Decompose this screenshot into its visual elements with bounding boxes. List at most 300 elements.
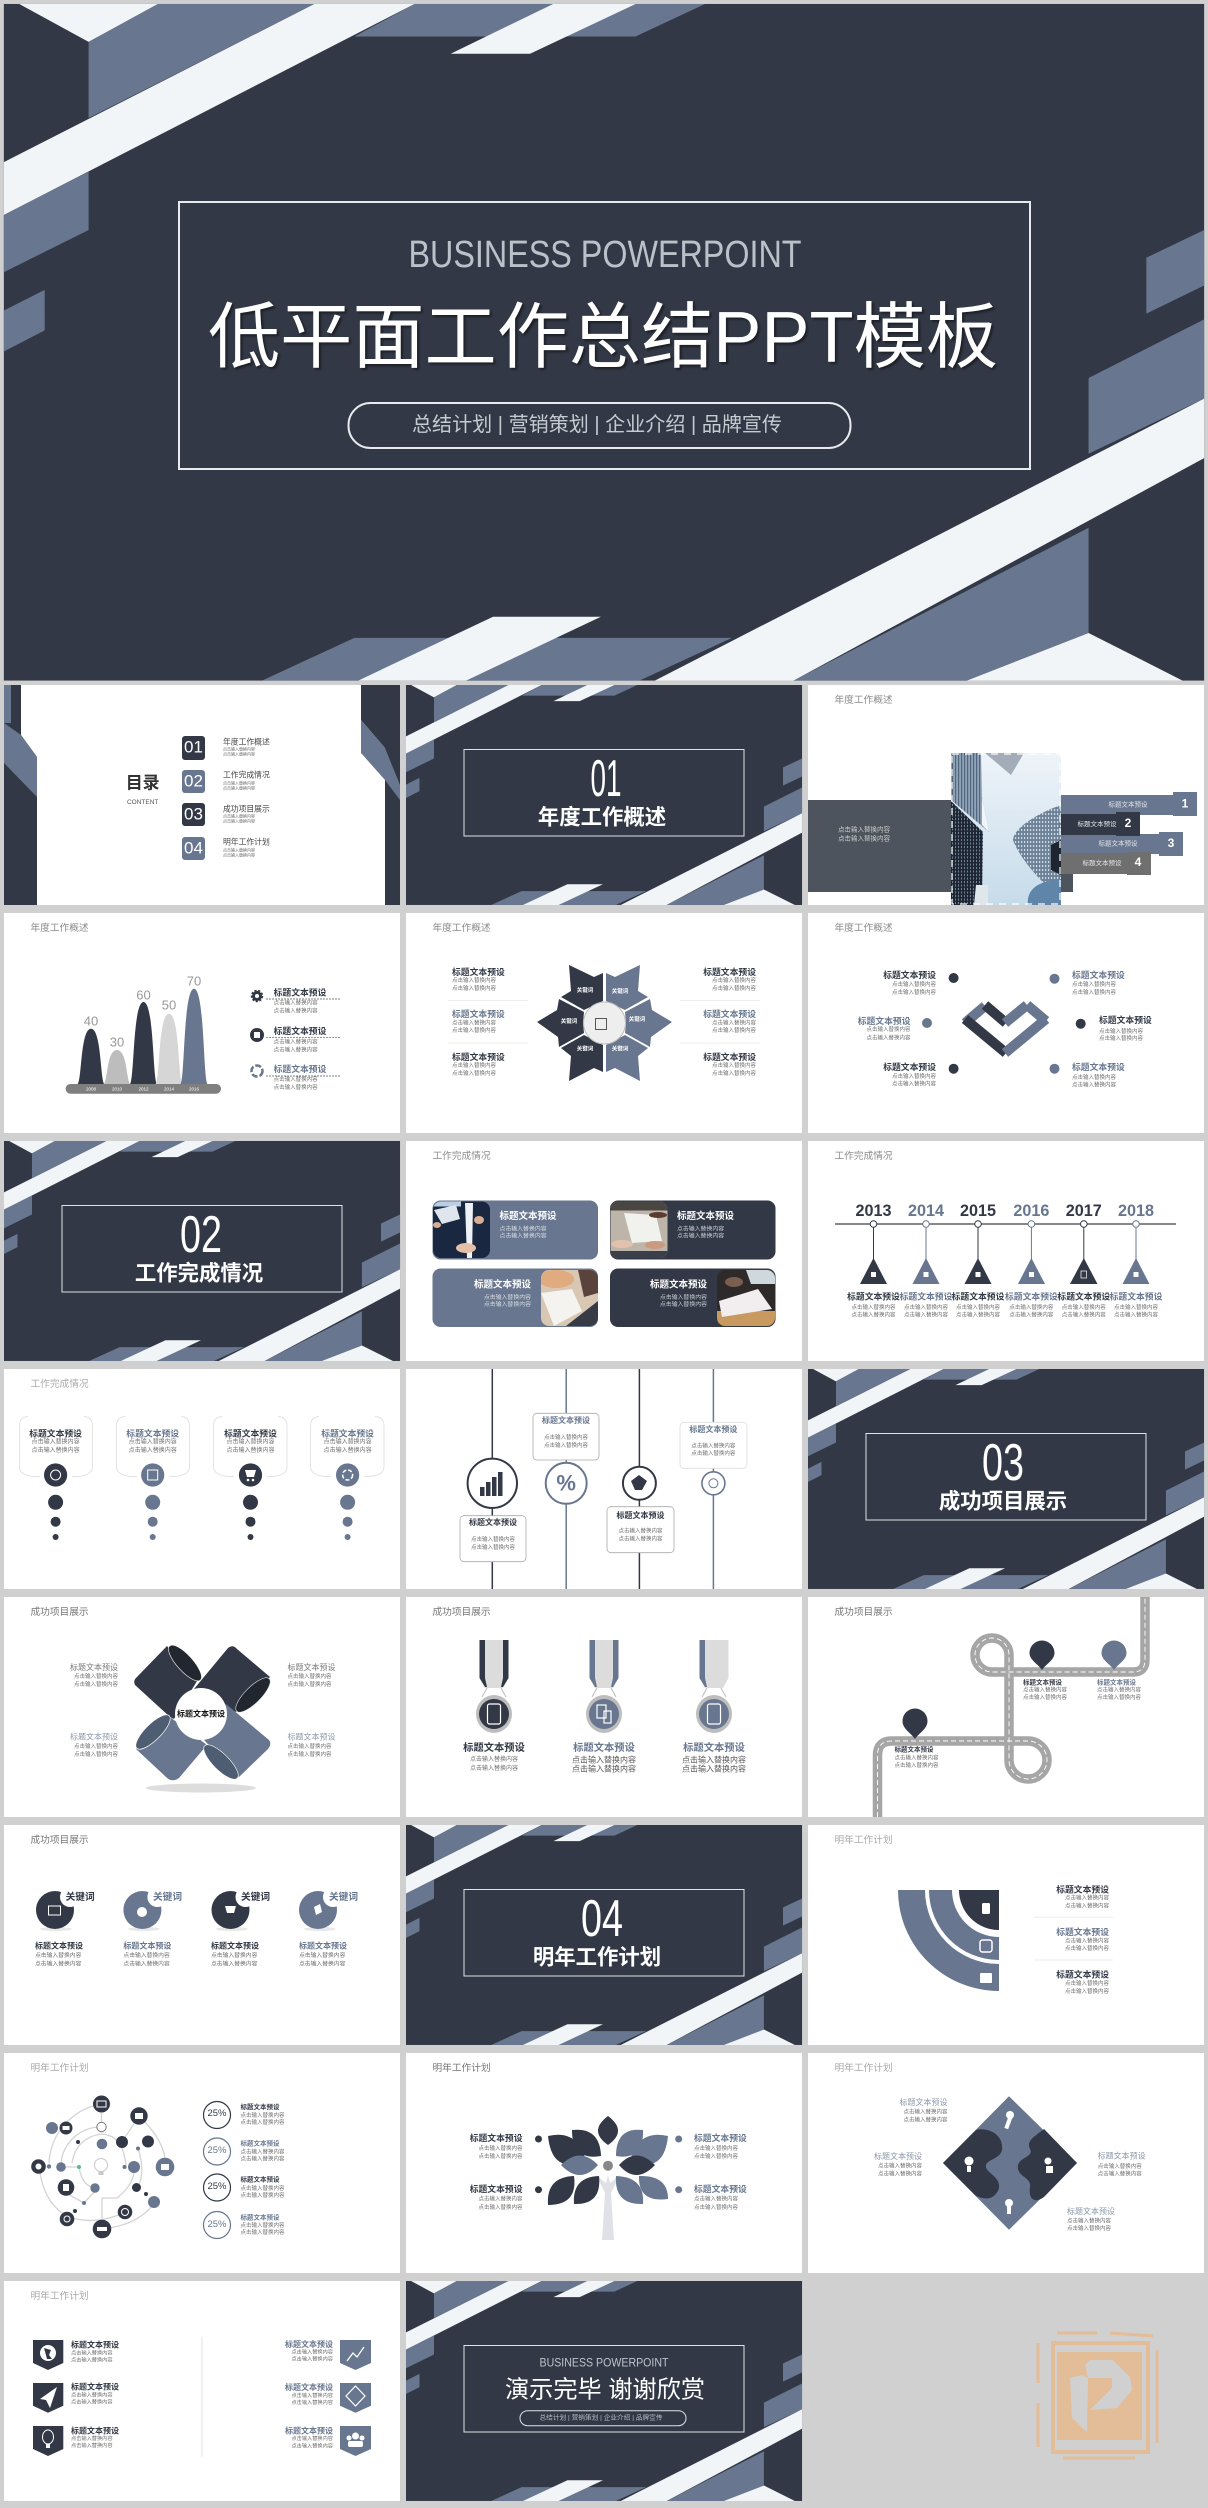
percent 3: 25% bbox=[207, 2181, 227, 2192]
keyword 1: 点击输入替换内容 bbox=[35, 1951, 82, 1959]
text mid left bbox=[874, 2151, 922, 2177]
card 1: 标题文本预设 bbox=[500, 1210, 557, 1222]
column 2: 点击输入替换内容 bbox=[129, 1437, 177, 1445]
slide: road map bbox=[808, 1597, 1204, 1817]
star of arrows: 关键词 bbox=[577, 1044, 594, 1052]
medal 2: 点击输入替换内容 bbox=[572, 1764, 636, 1774]
heading: 年度工作概述 bbox=[834, 693, 893, 706]
right texts: 点击输入替换内容 bbox=[712, 976, 756, 984]
left texts: 标题文本预设 bbox=[452, 1051, 505, 1062]
right shield 1: 点击输入替换内容 bbox=[291, 2348, 333, 2356]
percent 4: 25% bbox=[207, 2219, 227, 2230]
thread 1: 点击输入替换内容 bbox=[471, 1535, 515, 1543]
left shield 1: 点击输入替换内容 bbox=[71, 2348, 113, 2356]
slide background bbox=[4, 1369, 400, 1589]
right texts bbox=[694, 2132, 747, 2211]
bell chart: 60 bbox=[136, 988, 151, 1002]
left shield 3: 点击输入替换内容 bbox=[71, 2434, 113, 2442]
item 04: 明年工作计划 bbox=[223, 836, 270, 846]
text mid left: 标题文本预设 bbox=[874, 2151, 922, 2161]
right shield 2: 点击输入替换内容 bbox=[291, 2398, 333, 2406]
thread 2: 点击输入替换内容 bbox=[544, 1441, 588, 1449]
slide: quarter rings bbox=[808, 1825, 1204, 2045]
left texts: 点击输入替换内容 bbox=[892, 980, 936, 988]
right texts: 点击输入替换内容 bbox=[712, 1061, 756, 1069]
text 2: 点击输入替换内容 bbox=[1023, 1686, 1068, 1694]
card 1: 点击输入替换内容 bbox=[500, 1224, 547, 1232]
left texts: 点击输入替换内容 bbox=[478, 2195, 523, 2203]
pin 3 bbox=[1102, 1640, 1126, 1670]
shadow bbox=[146, 1784, 256, 1792]
card 4: 点击输入替换内容 bbox=[660, 1293, 707, 1301]
slide: vertical threads bbox=[406, 1369, 802, 1589]
right texts: 点击输入替换内容 bbox=[694, 2203, 739, 2211]
right decoration bbox=[361, 685, 400, 905]
left shield 2 bbox=[33, 2382, 119, 2413]
keyword 3: 点击输入替换内容 bbox=[211, 1959, 258, 1967]
left texts bbox=[858, 969, 936, 1088]
right texts: 点击输入替换内容 bbox=[694, 2152, 739, 2160]
keyword 1 bbox=[35, 1887, 95, 1967]
card 2: 点击输入替换内容 bbox=[677, 1224, 724, 1232]
road bbox=[878, 1597, 1145, 1817]
card 2 bbox=[610, 1200, 776, 1260]
grey panel bbox=[808, 800, 1073, 892]
heading: 年度工作概述 bbox=[834, 921, 893, 934]
thread 1 bbox=[460, 1369, 526, 1589]
keyword 3: 点击输入替换内容 bbox=[211, 1951, 258, 1959]
heading: 明年工作计划 bbox=[834, 1833, 893, 1846]
heading: 成功项目展示 bbox=[432, 1606, 491, 1618]
keyword 1: 关键词 bbox=[66, 1890, 95, 1903]
right texts: 点击输入替换内容 bbox=[288, 1742, 332, 1750]
right texts: 点击输入替换内容 bbox=[288, 1672, 332, 1680]
right texts: 点击输入替换内容 bbox=[712, 1026, 756, 1034]
right texts bbox=[288, 1662, 336, 1758]
slide: photo with ribbons bbox=[808, 685, 1204, 905]
keyword 2: 点击输入替换内容 bbox=[123, 1959, 170, 1967]
left shield 2: 点击输入替换内容 bbox=[71, 2390, 113, 2398]
text bottom right bbox=[1067, 2206, 1115, 2232]
watermark stamp bbox=[1038, 2333, 1157, 2458]
list item 3: 标题文本预设 bbox=[274, 1063, 327, 1074]
left decoration bbox=[4, 685, 37, 905]
left texts: 点击输入替换内容 bbox=[74, 1672, 118, 1680]
item 03: 点击输入替换内容 bbox=[223, 812, 255, 818]
item 04: 点击输入替换内容 bbox=[223, 852, 255, 858]
text 1: 标题文本预设 bbox=[1056, 1883, 1109, 1894]
keyword 2: 点击输入替换内容 bbox=[123, 1951, 170, 1959]
percent 2 bbox=[204, 2138, 285, 2165]
card 2: 点击输入替换内容 bbox=[677, 1232, 724, 1240]
list item 1: 标题文本预设 bbox=[274, 986, 327, 998]
bell chart: 30 bbox=[110, 1034, 124, 1050]
item 02: 工作完成情况 bbox=[223, 770, 270, 780]
section number: 03 bbox=[982, 1434, 1024, 1492]
star of arrows bbox=[537, 965, 672, 1081]
text right: 点击输入替换内容 bbox=[1098, 2170, 1142, 2178]
slide background bbox=[808, 1597, 1204, 1817]
column 2: 标题文本预设 bbox=[126, 1427, 179, 1438]
ribbon 1 bbox=[1061, 792, 1197, 816]
bell chart: 2016 bbox=[189, 1086, 200, 1092]
percent 1: 点击输入替换内容 bbox=[240, 2111, 285, 2119]
left texts: 点击输入替换内容 bbox=[892, 1080, 936, 1088]
right texts: 点击输入替换内容 bbox=[288, 1680, 332, 1688]
leaves bbox=[548, 2116, 668, 2205]
right texts: 标题文本预设 bbox=[1072, 1061, 1125, 1072]
cover background shapes bbox=[4, 1141, 400, 1361]
text 3 bbox=[1097, 1678, 1142, 1701]
year 2015: 标题文本预设 bbox=[952, 1291, 1005, 1302]
slide: bubbles columns bbox=[4, 1369, 400, 1589]
right texts: 点击输入替换内容 bbox=[694, 2195, 739, 2203]
text 2: 标题文本预设 bbox=[1056, 1926, 1109, 1937]
column 1: 点击输入替换内容 bbox=[32, 1446, 80, 1454]
item 02: 点击输入替换内容 bbox=[223, 780, 255, 786]
heading: 工作完成情况 bbox=[432, 1149, 491, 1162]
column 1: 标题文本预设 bbox=[29, 1427, 82, 1438]
year 2014 bbox=[900, 1202, 953, 1319]
heading: 工作完成情况 bbox=[30, 1377, 89, 1390]
ribbon 3: 标题文本预设 bbox=[1098, 838, 1138, 848]
percent 3: 标题文本预设 bbox=[240, 2174, 280, 2184]
slide: shields bbox=[4, 2281, 400, 2501]
heart diagram bbox=[965, 1005, 1046, 1053]
right texts: 标题文本预设 bbox=[288, 1732, 336, 1742]
text 1 bbox=[1056, 1883, 1109, 1910]
keyword 3 bbox=[211, 1887, 270, 1967]
column 4: 点击输入替换内容 bbox=[324, 1437, 372, 1445]
card 4: 标题文本预设 bbox=[650, 1278, 707, 1290]
medal 1 bbox=[463, 1640, 526, 1772]
right texts: 标题文本预设 bbox=[694, 2183, 747, 2194]
right texts: 标题文本预设 bbox=[1072, 969, 1125, 980]
right texts: 点击输入替换内容 bbox=[1099, 1027, 1144, 1035]
left shield 2: 点击输入替换内容 bbox=[71, 2397, 113, 2405]
left shield 1: 标题文本预设 bbox=[71, 2340, 119, 2350]
keyword 4: 点击输入替换内容 bbox=[299, 1959, 346, 1967]
list item 2: 点击输入替换内容 bbox=[274, 1045, 318, 1053]
medal 3 bbox=[682, 1640, 746, 1774]
right texts: 标题文本预设 bbox=[703, 1051, 756, 1062]
thread 1: 点击输入替换内容 bbox=[471, 1543, 515, 1551]
right texts: 点击输入替换内容 bbox=[712, 984, 756, 992]
left texts: 点击输入替换内容 bbox=[478, 2152, 523, 2160]
bell chart: 2014 bbox=[164, 1086, 175, 1092]
item 01: 年度工作概述 bbox=[223, 736, 270, 746]
right texts: 标题文本预设 bbox=[1099, 1014, 1152, 1025]
thread 3: 点击输入替换内容 bbox=[618, 1534, 663, 1542]
column 4: 点击输入替换内容 bbox=[324, 1446, 372, 1454]
slide background bbox=[808, 685, 1204, 905]
section number: 02 bbox=[180, 1206, 222, 1264]
left texts: 标题文本预设 bbox=[452, 966, 505, 977]
year 2016: 标题文本预设 bbox=[1005, 1291, 1058, 1302]
keyword 2: 标题文本预设 bbox=[123, 1940, 171, 1950]
text bottom right: 点击输入替换内容 bbox=[1067, 2216, 1112, 2224]
slide background bbox=[406, 913, 802, 1133]
text mid left: 点击输入替换内容 bbox=[878, 2169, 922, 2177]
slide: arrow star bbox=[406, 913, 802, 1133]
thread 3: 点击输入替换内容 bbox=[618, 1526, 663, 1534]
slide: closing cover bbox=[406, 2281, 802, 2501]
year 2018: 点击输入替换内容 bbox=[1114, 1303, 1158, 1311]
timeline axis bbox=[835, 1223, 1176, 1225]
year 2017 bbox=[1057, 1202, 1110, 1319]
percent 2: 点击输入替换内容 bbox=[240, 2148, 285, 2156]
slide: heart bbox=[808, 913, 1204, 1133]
keyword 3: 标题文本预设 bbox=[211, 1940, 259, 1950]
year 2017: 点击输入替换内容 bbox=[1062, 1311, 1106, 1319]
medal 3: 点击输入替换内容 bbox=[682, 1764, 746, 1774]
section number: 04 bbox=[581, 1890, 623, 1948]
dots bbox=[535, 2136, 682, 2193]
left texts bbox=[448, 966, 528, 1077]
left texts: 标题文本预设 bbox=[883, 969, 936, 980]
percent 2: 25% bbox=[207, 2145, 227, 2156]
percent 4: 点击输入替换内容 bbox=[240, 2228, 285, 2236]
left texts: 点击输入替换内容 bbox=[74, 1742, 118, 1750]
column 1 bbox=[19, 1417, 92, 1540]
text bottom right: 点击输入替换内容 bbox=[1067, 2224, 1112, 2232]
left texts: 点击输入替换内容 bbox=[452, 1018, 497, 1026]
slide background bbox=[4, 1825, 400, 2045]
slide background bbox=[406, 1597, 802, 1817]
left texts: 标题文本预设 bbox=[470, 2132, 523, 2143]
column 3: 点击输入替换内容 bbox=[226, 1446, 275, 1454]
year 2013: 标题文本预设 bbox=[847, 1291, 900, 1302]
thread 2 bbox=[533, 1369, 599, 1589]
year 2015: 点击输入替换内容 bbox=[956, 1303, 1000, 1311]
pin 2 bbox=[1030, 1640, 1054, 1670]
text 3: 点击输入替换内容 bbox=[1065, 1979, 1109, 1987]
year 2017: 标题文本预设 bbox=[1057, 1291, 1110, 1302]
right texts: 标题文本预设 bbox=[703, 1008, 756, 1019]
thread 1: 标题文本预设 bbox=[469, 1517, 517, 1527]
column 4 bbox=[311, 1417, 384, 1540]
keyword 4: 点击输入替换内容 bbox=[299, 1951, 346, 1959]
slide background bbox=[406, 2053, 802, 2273]
subtitle: BUSINESS POWERPOINT bbox=[408, 234, 802, 276]
percent 4: 点击输入替换内容 bbox=[240, 2221, 285, 2229]
text 3: 点击输入替换内容 bbox=[1065, 1987, 1109, 1995]
heading english: CONTENT bbox=[127, 799, 158, 806]
heading: 成功项目展示 bbox=[834, 1606, 893, 1618]
year 2014: 点击输入替换内容 bbox=[904, 1311, 948, 1319]
list item 3: 点击输入替换内容 bbox=[274, 1083, 318, 1091]
left texts bbox=[70, 1662, 118, 1758]
star of arrows: 关键词 bbox=[612, 987, 629, 995]
text 2 bbox=[1023, 1678, 1068, 1701]
list item 1: 点击输入替换内容 bbox=[274, 1006, 318, 1014]
right shield 2 bbox=[285, 2382, 371, 2413]
slide: photo cards bbox=[406, 1141, 802, 1361]
year 2015 bbox=[952, 1202, 1005, 1319]
left texts: 点击输入替换内容 bbox=[892, 988, 936, 996]
year 2016 bbox=[1005, 1202, 1058, 1319]
heading: 目录 bbox=[126, 774, 160, 792]
card 3: 点击输入替换内容 bbox=[484, 1300, 531, 1308]
percent 1: 标题文本预设 bbox=[240, 2102, 280, 2111]
text 2: 标题文本预设 bbox=[1023, 1678, 1062, 1686]
section number: 01 bbox=[590, 750, 622, 808]
percent 2: 点击输入替换内容 bbox=[240, 2154, 285, 2162]
item 03: 点击输入替换内容 bbox=[223, 818, 255, 824]
left texts: 点击输入替换内容 bbox=[74, 1750, 118, 1758]
year 2018 bbox=[1110, 1202, 1163, 1319]
year 2014: 2014 bbox=[908, 1202, 945, 1220]
slide: medals bbox=[406, 1597, 802, 1817]
network diagram bbox=[31, 2096, 174, 2238]
text 1: 标题文本预设 bbox=[894, 1744, 934, 1754]
medal 3: 标题文本预设 bbox=[683, 1741, 746, 1754]
item 01: 点击输入替换内容 bbox=[223, 750, 255, 756]
medal 2: 标题文本预设 bbox=[573, 1741, 636, 1754]
item 04: 点击输入替换内容 bbox=[223, 846, 255, 852]
right texts: 点击输入替换内容 bbox=[1072, 1081, 1117, 1089]
bell chart: 2008 bbox=[86, 1086, 97, 1092]
column 3: 标题文本预设 bbox=[224, 1427, 277, 1438]
left texts bbox=[470, 2132, 523, 2211]
year 2018: 标题文本预设 bbox=[1110, 1291, 1163, 1302]
left texts: 点击输入替换内容 bbox=[866, 1034, 911, 1042]
right texts: 点击输入替换内容 bbox=[1072, 1073, 1117, 1081]
ribbon 4: 4 bbox=[1135, 855, 1142, 869]
heading: 明年工作计划 bbox=[30, 2289, 89, 2302]
text bottom right: 标题文本预设 bbox=[1067, 2206, 1115, 2216]
slide: section 01 bbox=[406, 685, 802, 905]
card 4 bbox=[610, 1268, 776, 1327]
right shield 3: 标题文本预设 bbox=[285, 2426, 333, 2436]
card 3: 点击输入替换内容 bbox=[484, 1293, 531, 1301]
text top left: 标题文本预设 bbox=[900, 2097, 948, 2107]
star of arrows: 关键词 bbox=[577, 986, 594, 994]
column 1: 点击输入替换内容 bbox=[32, 1437, 80, 1445]
right texts: 点击输入替换内容 bbox=[694, 2144, 739, 2152]
list item 3 bbox=[252, 1063, 341, 1091]
text right bbox=[1098, 2150, 1146, 2178]
ribbon 1: 标题文本预设 bbox=[1108, 800, 1148, 808]
panel text: 点击输入替换内容 bbox=[838, 834, 890, 842]
cover background shapes bbox=[406, 1825, 802, 2045]
cover background shapes bbox=[406, 2281, 802, 2501]
centre line bbox=[201, 2337, 203, 2457]
percent 1: 25% bbox=[207, 2108, 227, 2119]
main title: 低平面工作总结PPT模板 bbox=[208, 298, 998, 378]
year 2014: 点击输入替换内容 bbox=[904, 1303, 948, 1311]
card 1: 点击输入替换内容 bbox=[500, 1232, 547, 1240]
list item 2: 点击输入替换内容 bbox=[274, 1038, 318, 1046]
slide: section 02 bbox=[4, 1141, 400, 1361]
text 3: 点击输入替换内容 bbox=[1097, 1693, 1142, 1701]
left shield 2: 标题文本预设 bbox=[71, 2382, 119, 2392]
heading: 明年工作计划 bbox=[834, 2061, 893, 2074]
keyword 1: 标题文本预设 bbox=[35, 1940, 83, 1950]
slide: cross petals bbox=[4, 1597, 400, 1817]
cover background shapes bbox=[808, 1369, 1204, 1589]
thread 3 bbox=[607, 1369, 674, 1589]
frame bbox=[464, 2346, 744, 2432]
right shield 3 bbox=[285, 2426, 371, 2456]
item 02: 点击输入替换内容 bbox=[223, 784, 255, 790]
right shield 1: 标题文本预设 bbox=[285, 2339, 333, 2349]
card 1 bbox=[432, 1200, 598, 1260]
keyword 2: 关键词 bbox=[153, 1890, 182, 1903]
text top left bbox=[900, 2097, 948, 2123]
section title: 年度工作概述 bbox=[538, 806, 666, 830]
text 1 bbox=[894, 1744, 939, 1769]
keyword 4: 标题文本预设 bbox=[299, 1940, 347, 1950]
tag text: 总结计划 | 营销策划 | 企业介绍 | 品牌宣传 bbox=[412, 413, 782, 436]
cover background shapes bbox=[4, 4, 1204, 681]
bell chart: 40 bbox=[84, 1014, 98, 1028]
column 3 bbox=[214, 1417, 287, 1540]
bell chart bbox=[66, 974, 221, 1094]
year 2018: 点击输入替换内容 bbox=[1114, 1311, 1158, 1319]
column 2 bbox=[116, 1417, 190, 1540]
petals bbox=[131, 1641, 275, 1784]
ribbon 2: 标题文本预设 bbox=[1078, 819, 1117, 828]
panel text: 点击输入替换内容 bbox=[838, 824, 890, 834]
text 2: 点击输入替换内容 bbox=[1065, 1936, 1109, 1944]
year 2013: 点击输入替换内容 bbox=[851, 1303, 896, 1311]
right shield 2: 标题文本预设 bbox=[285, 2382, 333, 2392]
left shield 3 bbox=[33, 2426, 119, 2456]
left texts: 标题文本预设 bbox=[70, 1662, 118, 1672]
text 2 bbox=[1056, 1926, 1109, 1952]
text right: 点击输入替换内容 bbox=[1098, 2162, 1142, 2170]
text mid left: 点击输入替换内容 bbox=[878, 2162, 922, 2170]
text 1: 点击输入替换内容 bbox=[1065, 1902, 1109, 1910]
medal 2 bbox=[572, 1640, 636, 1774]
card 3: 标题文本预设 bbox=[474, 1278, 531, 1290]
left texts: 标题文本预设 bbox=[452, 1008, 505, 1019]
percent 3: 点击输入替换内容 bbox=[240, 2184, 285, 2192]
list item 1: 点击输入替换内容 bbox=[274, 999, 318, 1007]
percent 3: 点击输入替换内容 bbox=[240, 2191, 285, 2199]
left shield 1: 点击输入替换内容 bbox=[71, 2355, 113, 2363]
slide background bbox=[808, 913, 1204, 1133]
frame bbox=[866, 1434, 1146, 1520]
right texts bbox=[680, 966, 760, 1077]
right texts: 标题文本预设 bbox=[694, 2132, 747, 2143]
slide background bbox=[4, 2281, 400, 2501]
thread 2: % bbox=[556, 1470, 576, 1496]
year 2017: 点击输入替换内容 bbox=[1062, 1303, 1106, 1311]
left texts: 点击输入替换内容 bbox=[452, 976, 497, 984]
item 03: 成功项目展示 bbox=[223, 804, 270, 814]
left texts: 标题文本预设 bbox=[858, 1015, 911, 1026]
left texts: 标题文本预设 bbox=[883, 1061, 936, 1072]
text 3 bbox=[1056, 1969, 1109, 1995]
item 04: 04 bbox=[184, 838, 203, 858]
year 2016: 点击输入替换内容 bbox=[1009, 1303, 1054, 1311]
bell chart: 2010 bbox=[112, 1086, 123, 1092]
card 3 bbox=[432, 1268, 598, 1327]
section title: 成功项目展示 bbox=[939, 1490, 1067, 1514]
slide: contents bbox=[4, 685, 400, 905]
pill bbox=[520, 2411, 686, 2426]
slide: timeline bbox=[808, 1141, 1204, 1361]
ribbon 3: 3 bbox=[1168, 836, 1175, 850]
keyword 2 bbox=[123, 1887, 182, 1967]
right texts: 点击输入替换内容 bbox=[1072, 980, 1117, 988]
panel text bbox=[838, 824, 890, 842]
tree trunk bbox=[596, 2175, 620, 2240]
bell chart: 50 bbox=[162, 998, 176, 1012]
frame bbox=[62, 1206, 342, 1292]
